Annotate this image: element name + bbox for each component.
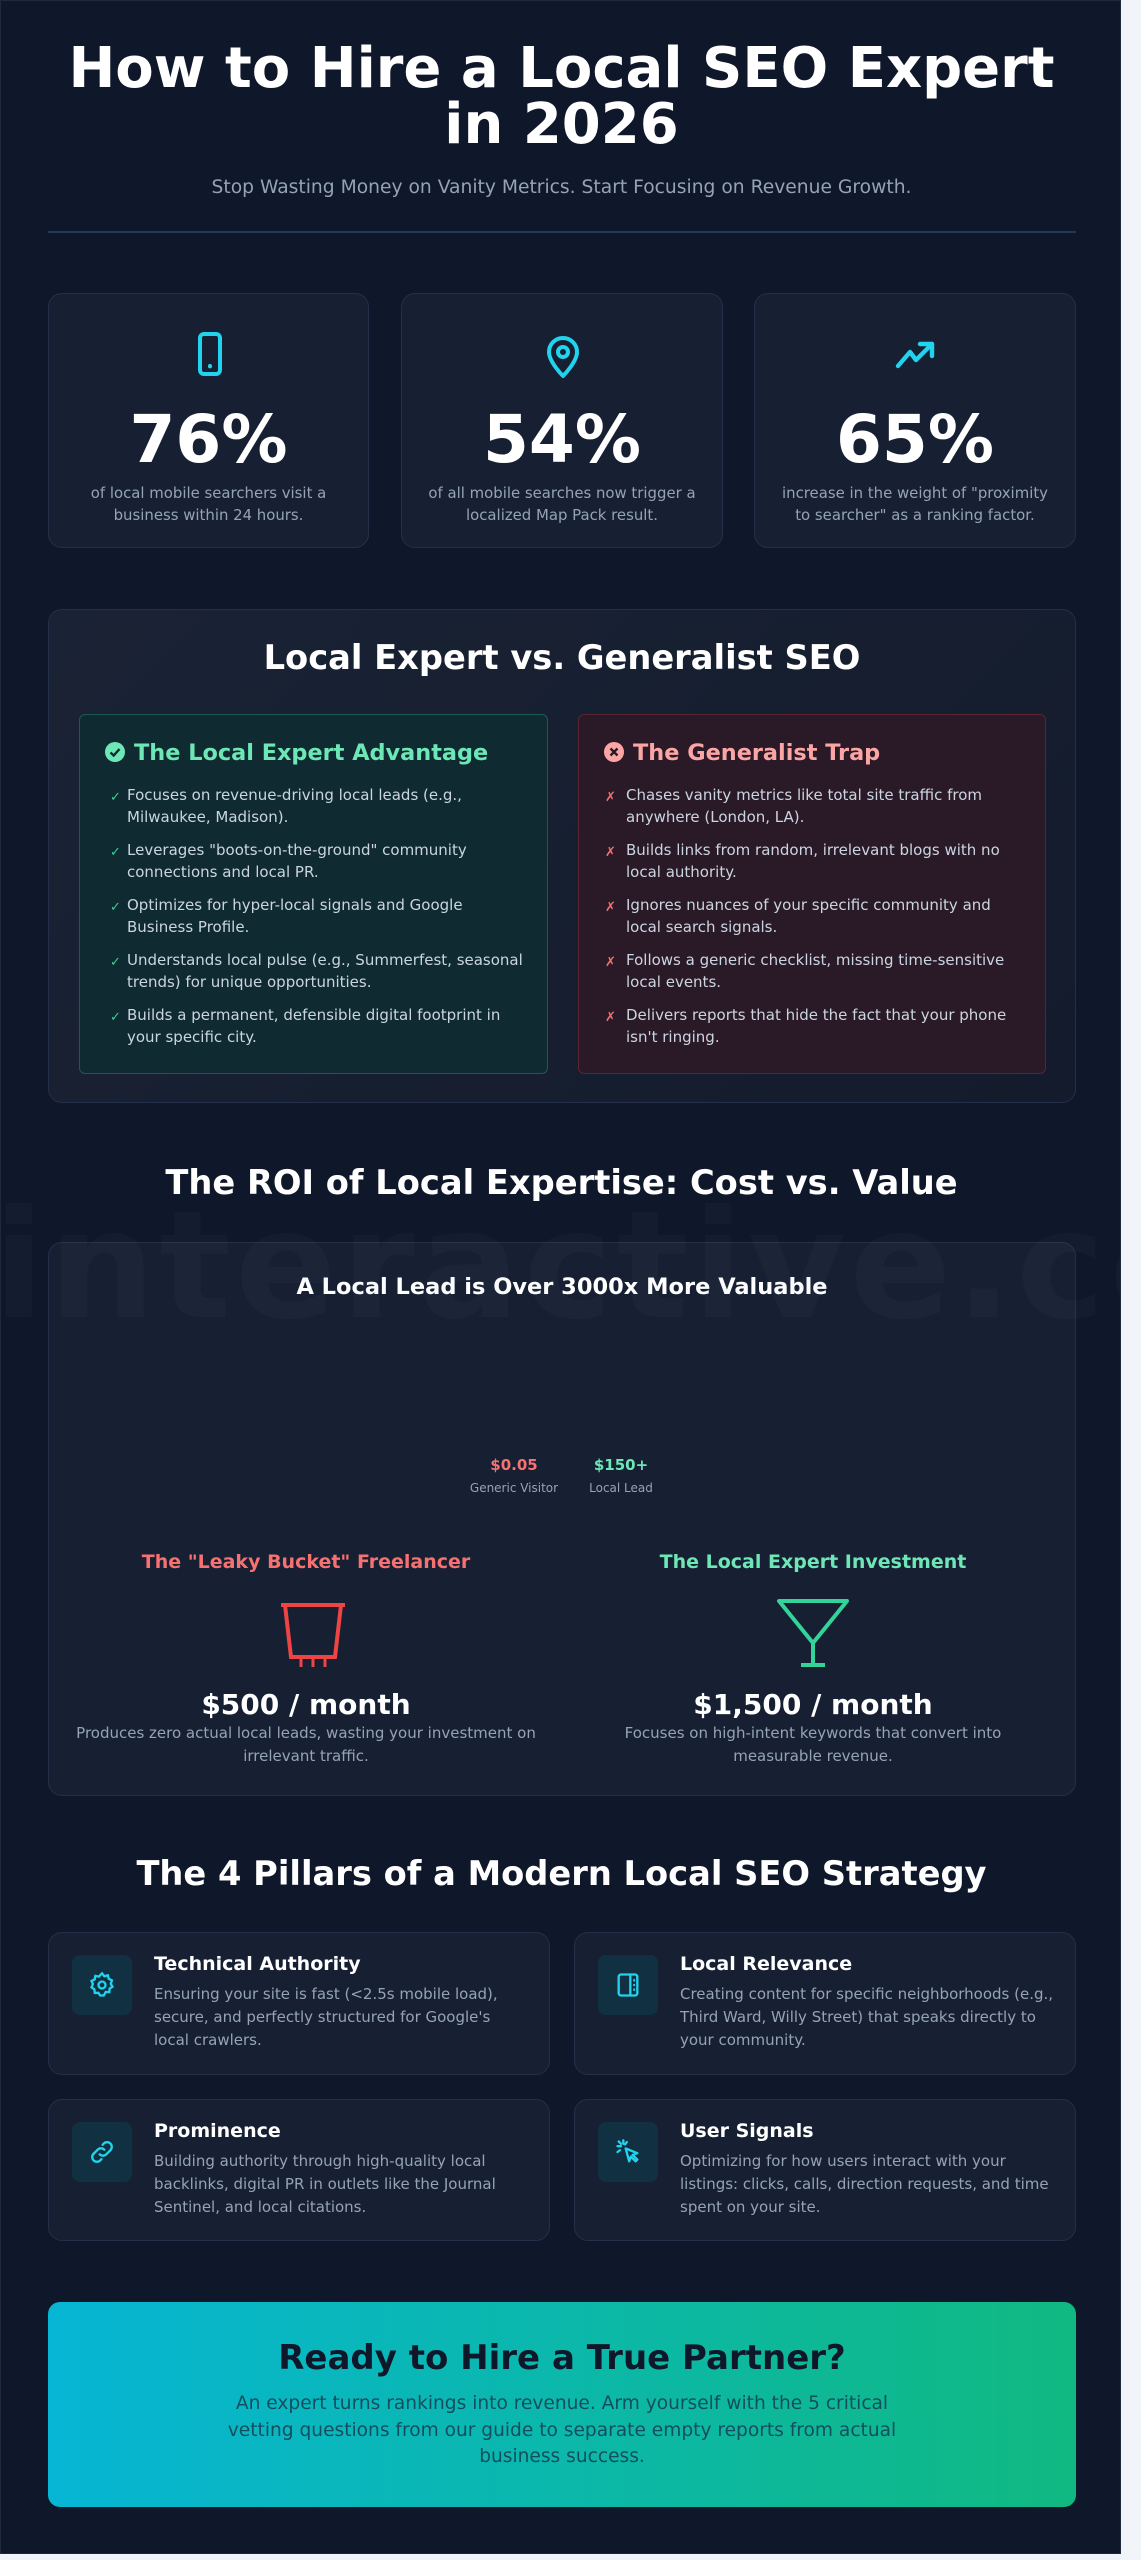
- heading: Local Expert vs. Generalist SEO: [264, 638, 860, 677]
- pillar: local relevance: [574, 1932, 1076, 2075]
- pillar: technical authority: local crawlers.: [154, 2031, 262, 2049]
- pillar: prominence: [48, 2099, 550, 2241]
- description: [91, 484, 326, 524]
- bullet list: Leverages "boots-on-the-ground" community: [127, 841, 467, 859]
- bullet list: isn't ringing.: [626, 1028, 720, 1046]
- CTA heading: Ready to Hire a True Partner?: [278, 2338, 846, 2378]
- number: 76%: [130, 401, 287, 478]
- bullet list: ✓: [110, 1010, 121, 1025]
- subtitle: Stop Wasting Money on Vanity Metrics. Start Focusing on Revenue Growth.: [212, 177, 911, 198]
- title: How to Hire a Local SEO Expert: [68, 36, 1055, 101]
- option: local expert investment: The Local Expert Investment: [660, 1551, 966, 1573]
- icon: gear: [72, 1955, 132, 2015]
- bullet list: trends) for unique opportunities.: [127, 973, 372, 991]
- bullet list: Chases vanity metrics like total site traffic from: [626, 786, 982, 804]
- bullet list: [110, 786, 523, 1046]
- pillar: user signals: User Signals: [680, 2120, 814, 2142]
- pillar: prominence: backlinks, digital PR in outlets like the Journal: [154, 2175, 496, 2193]
- bullet list: Optimizes for hyper-local signals and Google: [127, 896, 463, 914]
- icon: document: [598, 1955, 658, 2015]
- title: in 2026: [444, 92, 679, 157]
- bullet list: Delivers reports that hide the fact that your phone: [626, 1006, 1006, 1024]
- bullet list: ✓: [110, 845, 121, 860]
- bullet list: ✓: [110, 900, 121, 915]
- pillar: technical authority: Ensuring your site is fast (<2.5s mobile load),: [154, 1985, 498, 2003]
- option: leaky bucket freelancer: The "Leaky Bucket" Freelancer: [142, 1551, 470, 1573]
- panel: generalist trap: [578, 714, 1046, 1074]
- pillar: local relevance: your community.: [680, 2031, 806, 2049]
- bullet list: Builds a permanent, defensible digital footprint in: [127, 1006, 500, 1024]
- description: [428, 484, 696, 524]
- description: [782, 484, 1048, 524]
- pillar: prominence: Sentinel, and local citations.: [154, 2198, 366, 2216]
- description: increase in the weight of "proximity: [782, 484, 1048, 502]
- bullet list: local authority.: [626, 863, 737, 881]
- pillar: prominence: Prominence: [154, 2120, 281, 2142]
- chart: value labels: $150+: [594, 1456, 648, 1474]
- description: of all mobile searches now trigger a: [428, 484, 696, 502]
- option: leaky bucket freelancer: $500 / month: [201, 1688, 411, 1721]
- pillar: technical authority: Technical Authority: [154, 1953, 361, 1975]
- CTA text: An expert turns rankings into revenue. Arm yourself with the 5 critical: [236, 2393, 888, 2414]
- option: local expert investment: Focuses on high-intent keywords that convert into: [625, 1724, 1001, 1742]
- bullet list: Focuses on revenue-driving local leads (e.g.,: [127, 786, 462, 804]
- pillar: user signals: [574, 2099, 1076, 2241]
- CTA text: vetting questions from our guide to separate empty reports from actual: [228, 2420, 896, 2440]
- title: [68, 36, 1055, 157]
- bullet list: Follows a generic checklist, missing time-sensitive: [626, 951, 1004, 969]
- bullet list: ✗: [605, 955, 616, 970]
- description: business within 24 hours.: [114, 506, 303, 524]
- bullet list: [605, 786, 1006, 1046]
- bullet list: Ignores nuances of your specific community and: [626, 896, 991, 914]
- heading: ROI: The ROI of Local Expertise: Cost vs. Value: [165, 1163, 958, 1202]
- pillar: local relevance: Local Relevance: [680, 1953, 852, 1975]
- description: of local mobile searchers visit a: [91, 484, 326, 502]
- heading: pillars: The 4 Pillars of a Modern Local SEO Strategy: [136, 1854, 987, 1893]
- stat card: 76%: [48, 293, 369, 548]
- icon: cursor click: [598, 2122, 658, 2182]
- bullet list: Milwaukee, Madison).: [127, 808, 288, 826]
- bullet list: ✓: [110, 955, 121, 970]
- bullet list: local search signals.: [626, 918, 777, 936]
- bullet list: local events.: [626, 973, 721, 991]
- description: to searcher" as a ranking factor.: [795, 506, 1035, 524]
- bullet list: ✗: [605, 790, 616, 805]
- pillar: user signals: Optimizing for how users interact with your: [680, 2152, 1006, 2170]
- bullet list: your specific city.: [127, 1028, 257, 1046]
- icon: leaky bucket: [281, 1603, 345, 1667]
- pillar: technical authority: [48, 1932, 550, 2075]
- bullet list: anywhere (London, LA).: [626, 808, 804, 826]
- header: The Local Expert Advantage: [134, 740, 488, 766]
- number: 54%: [483, 401, 641, 478]
- bullet list: Understands local pulse (e.g., Summerfest, seasonal: [127, 951, 523, 969]
- option: leaky bucket freelancer: irrelevant traffic.: [243, 1747, 369, 1765]
- panel: comparison: [48, 609, 1076, 1103]
- bullet list: Business Profile.: [127, 918, 249, 936]
- chart: value labels: Generic Visitor: [470, 1481, 558, 1495]
- icon: funnel glass: [777, 1599, 849, 1667]
- panel: local expert advantage: [79, 714, 548, 1074]
- option: local expert investment: [625, 1551, 1001, 1765]
- description: localized Map Pack result.: [466, 506, 658, 524]
- bullet list: ✗: [605, 845, 616, 860]
- number: 65%: [836, 401, 994, 478]
- bullet list: ✓: [110, 790, 121, 805]
- bullet list: ✗: [605, 1010, 616, 1025]
- pillar: user signals: listings: clicks, calls, direction requests, and time: [680, 2175, 1049, 2193]
- chart title: A Local Lead is Over 3000x More Valuable: [296, 1274, 828, 1300]
- icon: link: [72, 2122, 132, 2182]
- bullet list: ✗: [605, 900, 616, 915]
- bullet list: Builds links from random, irrelevant blogs with no: [626, 841, 1000, 859]
- CTA text: business success.: [479, 2446, 645, 2467]
- icon: map pin: [547, 336, 579, 378]
- option: leaky bucket freelancer: Produces zero actual local leads, wasting your investment on: [76, 1724, 536, 1742]
- icon: phone: [198, 332, 222, 376]
- chart: value labels: Local Lead: [589, 1481, 653, 1495]
- icon: trending up: [896, 342, 934, 368]
- CTA text: [228, 2393, 896, 2467]
- option: local expert investment: measurable revenue.: [733, 1747, 893, 1765]
- pillar: prominence: Building authority through high-quality local: [154, 2152, 486, 2170]
- pillar: technical authority: secure, and perfectly structured for Google's: [154, 2008, 490, 2026]
- pillar: user signals: spent on your site.: [680, 2198, 821, 2216]
- stat card: 65%: [754, 293, 1076, 548]
- option: leaky bucket freelancer: [76, 1551, 536, 1765]
- panel: ROI: [48, 1242, 1076, 1796]
- CTA banner: [48, 2302, 1076, 2507]
- chart: value labels: [470, 1456, 653, 1495]
- stat card: 54%: [401, 293, 723, 548]
- header: The Generalist Trap: [633, 740, 880, 766]
- bullet list: connections and local PR.: [127, 863, 319, 881]
- option: local expert investment: $1,500 / month: [693, 1688, 933, 1721]
- pillar: local relevance: Creating content for specific neighborhoods (e.g.,: [680, 1985, 1053, 2003]
- chart: value labels: $0.05: [490, 1456, 538, 1474]
- pillar: local relevance: Third Ward, Willy Street) that speaks directly to: [680, 2008, 1036, 2026]
